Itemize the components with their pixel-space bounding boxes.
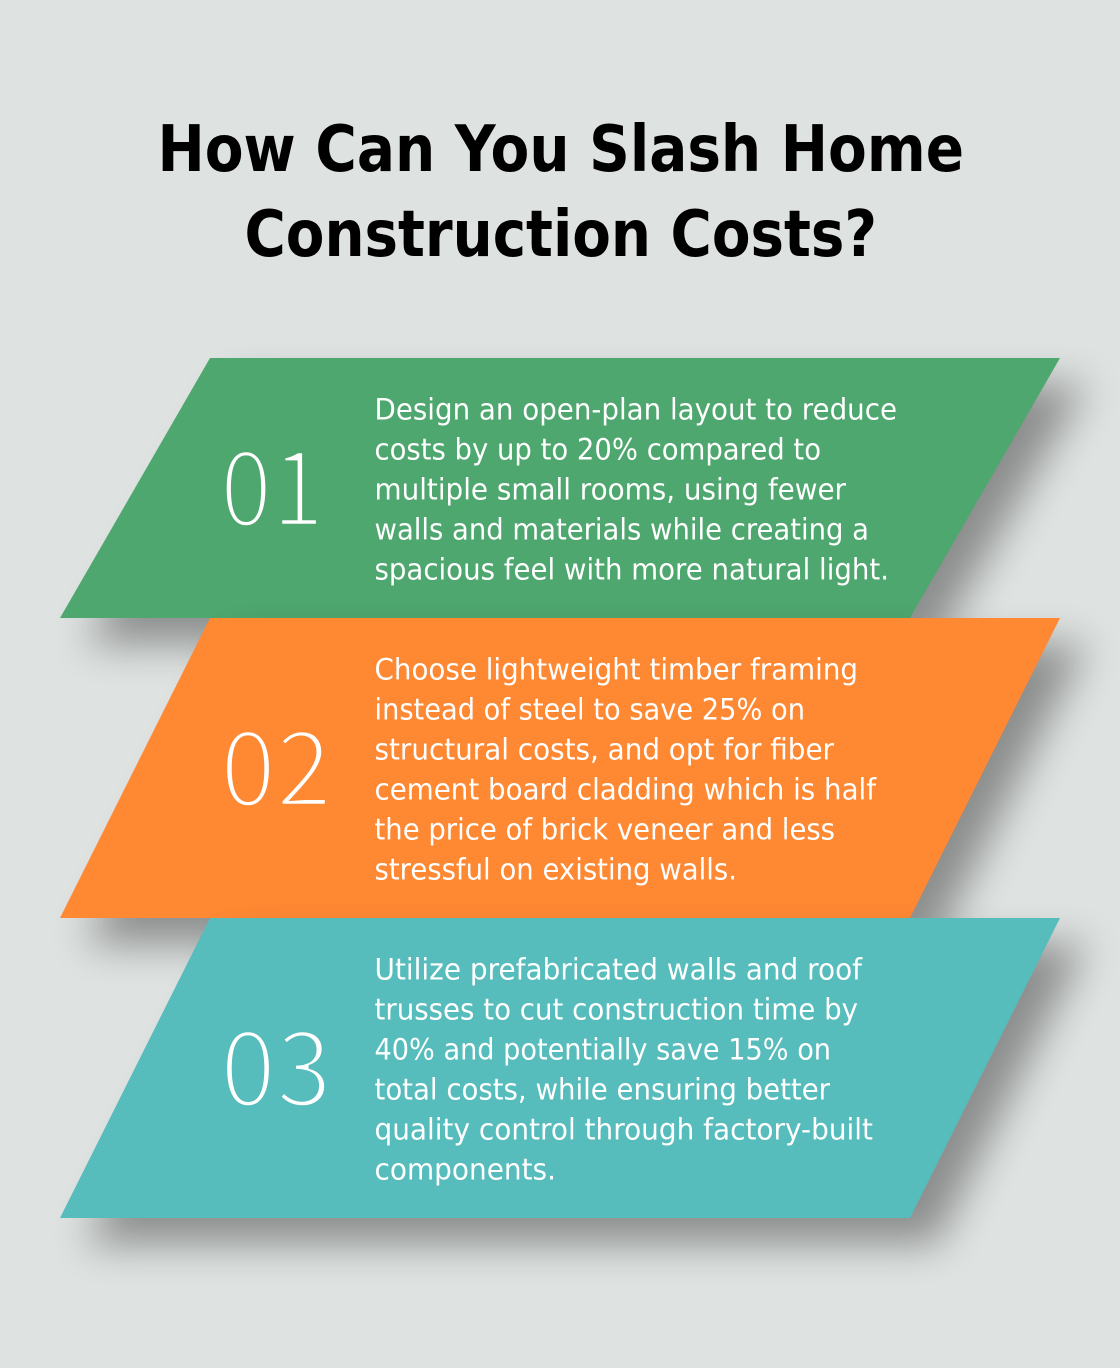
text: step 02 description <box>374 652 877 886</box>
text: step 01 description <box>374 392 897 586</box>
panel: step 01 <box>60 358 1060 618</box>
text: step 03 description: total costs, while ensuring better <box>374 1072 830 1106</box>
text: step 03 description <box>374 952 873 1186</box>
number 03: 03 <box>220 985 332 1137</box>
text: step 02 description: the price of brick veneer and less <box>374 812 835 846</box>
text: step 03 description: Utilize prefabricated walls and roof <box>374 952 863 986</box>
text: step 03 description: components. <box>374 1152 556 1186</box>
text: step 01 description: spacious feel with more natural light. <box>374 552 889 586</box>
text: step 01 description: multiple small rooms, using fewer <box>374 472 846 506</box>
teal parallelogram <box>60 918 1060 1218</box>
text: step 02 description: instead of steel to save 25% on <box>374 692 805 726</box>
number 01: 01 <box>220 405 324 557</box>
panel: step 03 <box>60 918 1060 1218</box>
text: step 01 description: Design an open-plan layout to reduce <box>374 392 897 426</box>
title: Construction Costs? <box>244 198 877 272</box>
title: How Can You Slash Home <box>158 113 964 187</box>
text: step 02 description: structural costs, and opt for fiber <box>374 732 834 766</box>
text: step 03 description: quality control through factory-built <box>374 1112 873 1146</box>
orange parallelogram <box>60 618 1060 918</box>
text: step 03 description: trusses to cut construction time by <box>374 992 858 1026</box>
text: step 01 description: walls and materials while creating a <box>374 512 869 546</box>
title <box>158 113 964 272</box>
text: step 01 description: costs by up to 20% compared to <box>374 432 821 466</box>
text: step 02 description: cement board cladding which is half <box>374 772 877 806</box>
number 02: 02 <box>220 685 332 837</box>
text: step 03 description: 40% and potentially save 15% on <box>374 1032 831 1066</box>
panel: step 02 <box>60 618 1060 918</box>
text: step 02 description: stressful on existing walls. <box>374 852 737 886</box>
text: step 02 description: Choose lightweight timber framing <box>374 652 858 686</box>
green parallelogram <box>60 358 1060 618</box>
